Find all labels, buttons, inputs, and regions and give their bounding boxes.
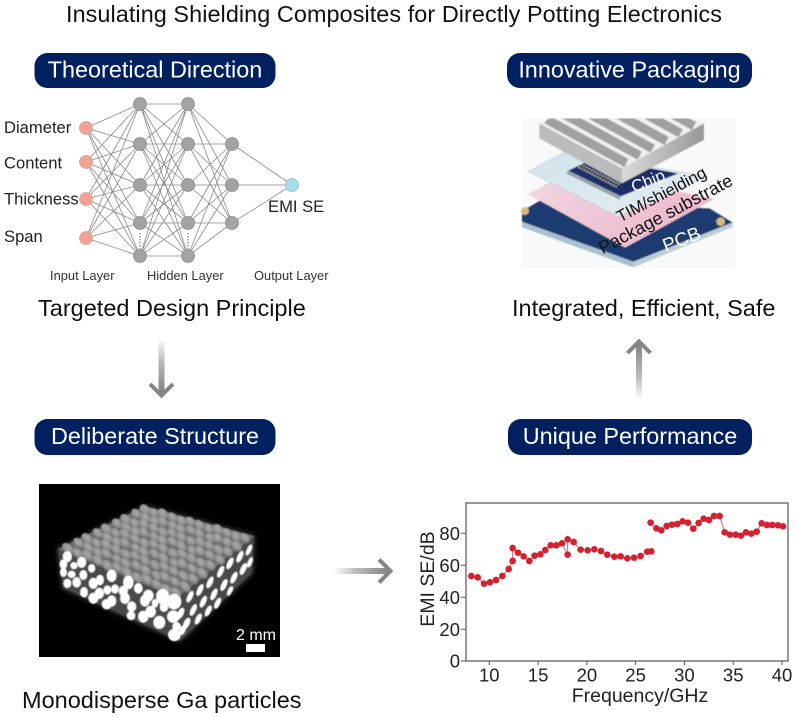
micro-CT image of Ga particles xyxy=(39,484,280,657)
data line xyxy=(471,516,783,584)
heading: Unique Performance: Unique Performance xyxy=(523,423,737,449)
neural network diagram xyxy=(4,98,329,283)
title: Insulating Shielding Composites for Directly Potting Electronics xyxy=(66,1,722,27)
x tick labels: 25 xyxy=(625,664,646,686)
layer labels: Output Layer xyxy=(254,268,329,283)
output node xyxy=(286,178,298,192)
scale bar xyxy=(246,644,265,652)
input labels: Content xyxy=(4,154,63,172)
package substrate layer xyxy=(528,168,714,248)
plot frame xyxy=(466,503,788,661)
layer labels: Input Layer xyxy=(50,268,115,283)
white particle cross-sections: side face xyxy=(176,544,254,635)
text: Targeted Design Principle: Targeted Design Principle xyxy=(38,295,306,321)
x tick labels: 15 xyxy=(528,664,548,686)
y tick labels: 0 xyxy=(450,650,460,672)
data series xyxy=(468,513,786,587)
input labels xyxy=(4,118,79,246)
chart: EMI SE vs frequency xyxy=(417,503,792,707)
input nodes xyxy=(80,122,92,244)
x axis title: Frequency/GHz xyxy=(572,685,708,707)
heading: Theoretical Direction: Theoretical Direction xyxy=(48,56,262,82)
input labels: Diameter xyxy=(4,118,72,137)
x tick labels xyxy=(479,664,792,686)
text: Monodisperse Ga particles: Monodisperse Ga particles xyxy=(22,687,302,713)
x tick labels: 35 xyxy=(723,664,743,686)
package substrate label: Package substrate xyxy=(595,170,736,258)
y tick labels xyxy=(439,523,460,672)
PCB board xyxy=(521,198,733,267)
white particle cross-sections: front face xyxy=(60,552,181,641)
packaging illustration xyxy=(520,118,734,268)
heading: Unique Performance xyxy=(508,419,752,455)
TIM/shielding layer xyxy=(528,152,707,217)
x tick labels: 40 xyxy=(772,664,792,686)
image artwork xyxy=(520,118,734,268)
TIM/shielding label: TIM/shielding xyxy=(613,163,710,226)
input labels: Thickness xyxy=(4,190,79,208)
x tick labels: 20 xyxy=(577,664,597,686)
axis ticks xyxy=(461,533,782,665)
heading: Deliberate Structure xyxy=(34,419,276,455)
top face spheres xyxy=(58,506,254,598)
arrow: right xyxy=(333,560,390,582)
heading: Theoretical Direction xyxy=(34,53,276,88)
input labels: Span xyxy=(4,227,43,246)
heading: Innovative Packaging xyxy=(507,53,752,88)
image background xyxy=(522,118,735,268)
heading: Innovative Packaging: Innovative Packaging xyxy=(518,56,741,82)
heading: Deliberate Structure: Deliberate Structure xyxy=(51,423,259,449)
x tick labels: 10 xyxy=(479,664,500,686)
hidden nodes xyxy=(134,98,238,262)
text: Integrated, Efficient, Safe: Integrated, Efficient, Safe xyxy=(512,295,775,321)
layer labels: Hidden Layer xyxy=(147,268,224,283)
PCB label: PCB xyxy=(660,223,704,257)
chip label: Chip xyxy=(628,166,668,197)
y tick labels: 60 xyxy=(439,555,460,576)
network connections xyxy=(86,104,292,256)
layer labels xyxy=(50,268,329,283)
heat sink xyxy=(538,118,704,184)
scale bar label: 2 mm xyxy=(236,627,276,644)
output label: EMI SE xyxy=(268,197,324,216)
y tick labels: 80 xyxy=(439,523,460,544)
block haze xyxy=(58,506,254,641)
data points xyxy=(468,513,786,587)
arrow: up xyxy=(628,342,650,400)
y tick labels: 20 xyxy=(439,619,460,640)
particle block xyxy=(58,502,254,641)
x tick labels: 30 xyxy=(674,664,695,686)
y tick labels: 40 xyxy=(439,587,460,608)
y axis title: EMI SE/dB xyxy=(417,531,439,627)
arrow: down xyxy=(150,338,173,396)
chip xyxy=(566,158,678,200)
